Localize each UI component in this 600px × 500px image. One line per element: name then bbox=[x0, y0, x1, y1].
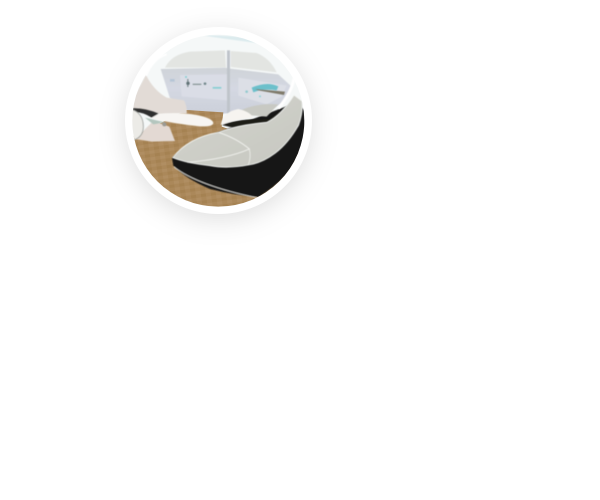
upper window glass bbox=[165, 50, 277, 72]
roof light strip bbox=[207, 35, 254, 43]
main seat cushion bbox=[173, 95, 302, 167]
wooden floor bbox=[134, 110, 298, 207]
dark seat shell bbox=[172, 102, 307, 198]
drop shadow bbox=[126, 34, 310, 218]
window pillar curve bbox=[278, 78, 294, 108]
circular photo of a vehicle lounge interior bbox=[118, 25, 320, 227]
footrest table bbox=[130, 108, 213, 140]
photo contents bbox=[130, 32, 310, 215]
cabin background bbox=[140, 35, 301, 129]
side wall window panels bbox=[161, 50, 292, 114]
white circular frame bbox=[125, 27, 312, 214]
left lounge seat bbox=[130, 75, 187, 142]
rear seat and curved headrest bbox=[220, 104, 278, 128]
wall screen graphics bbox=[170, 76, 285, 97]
